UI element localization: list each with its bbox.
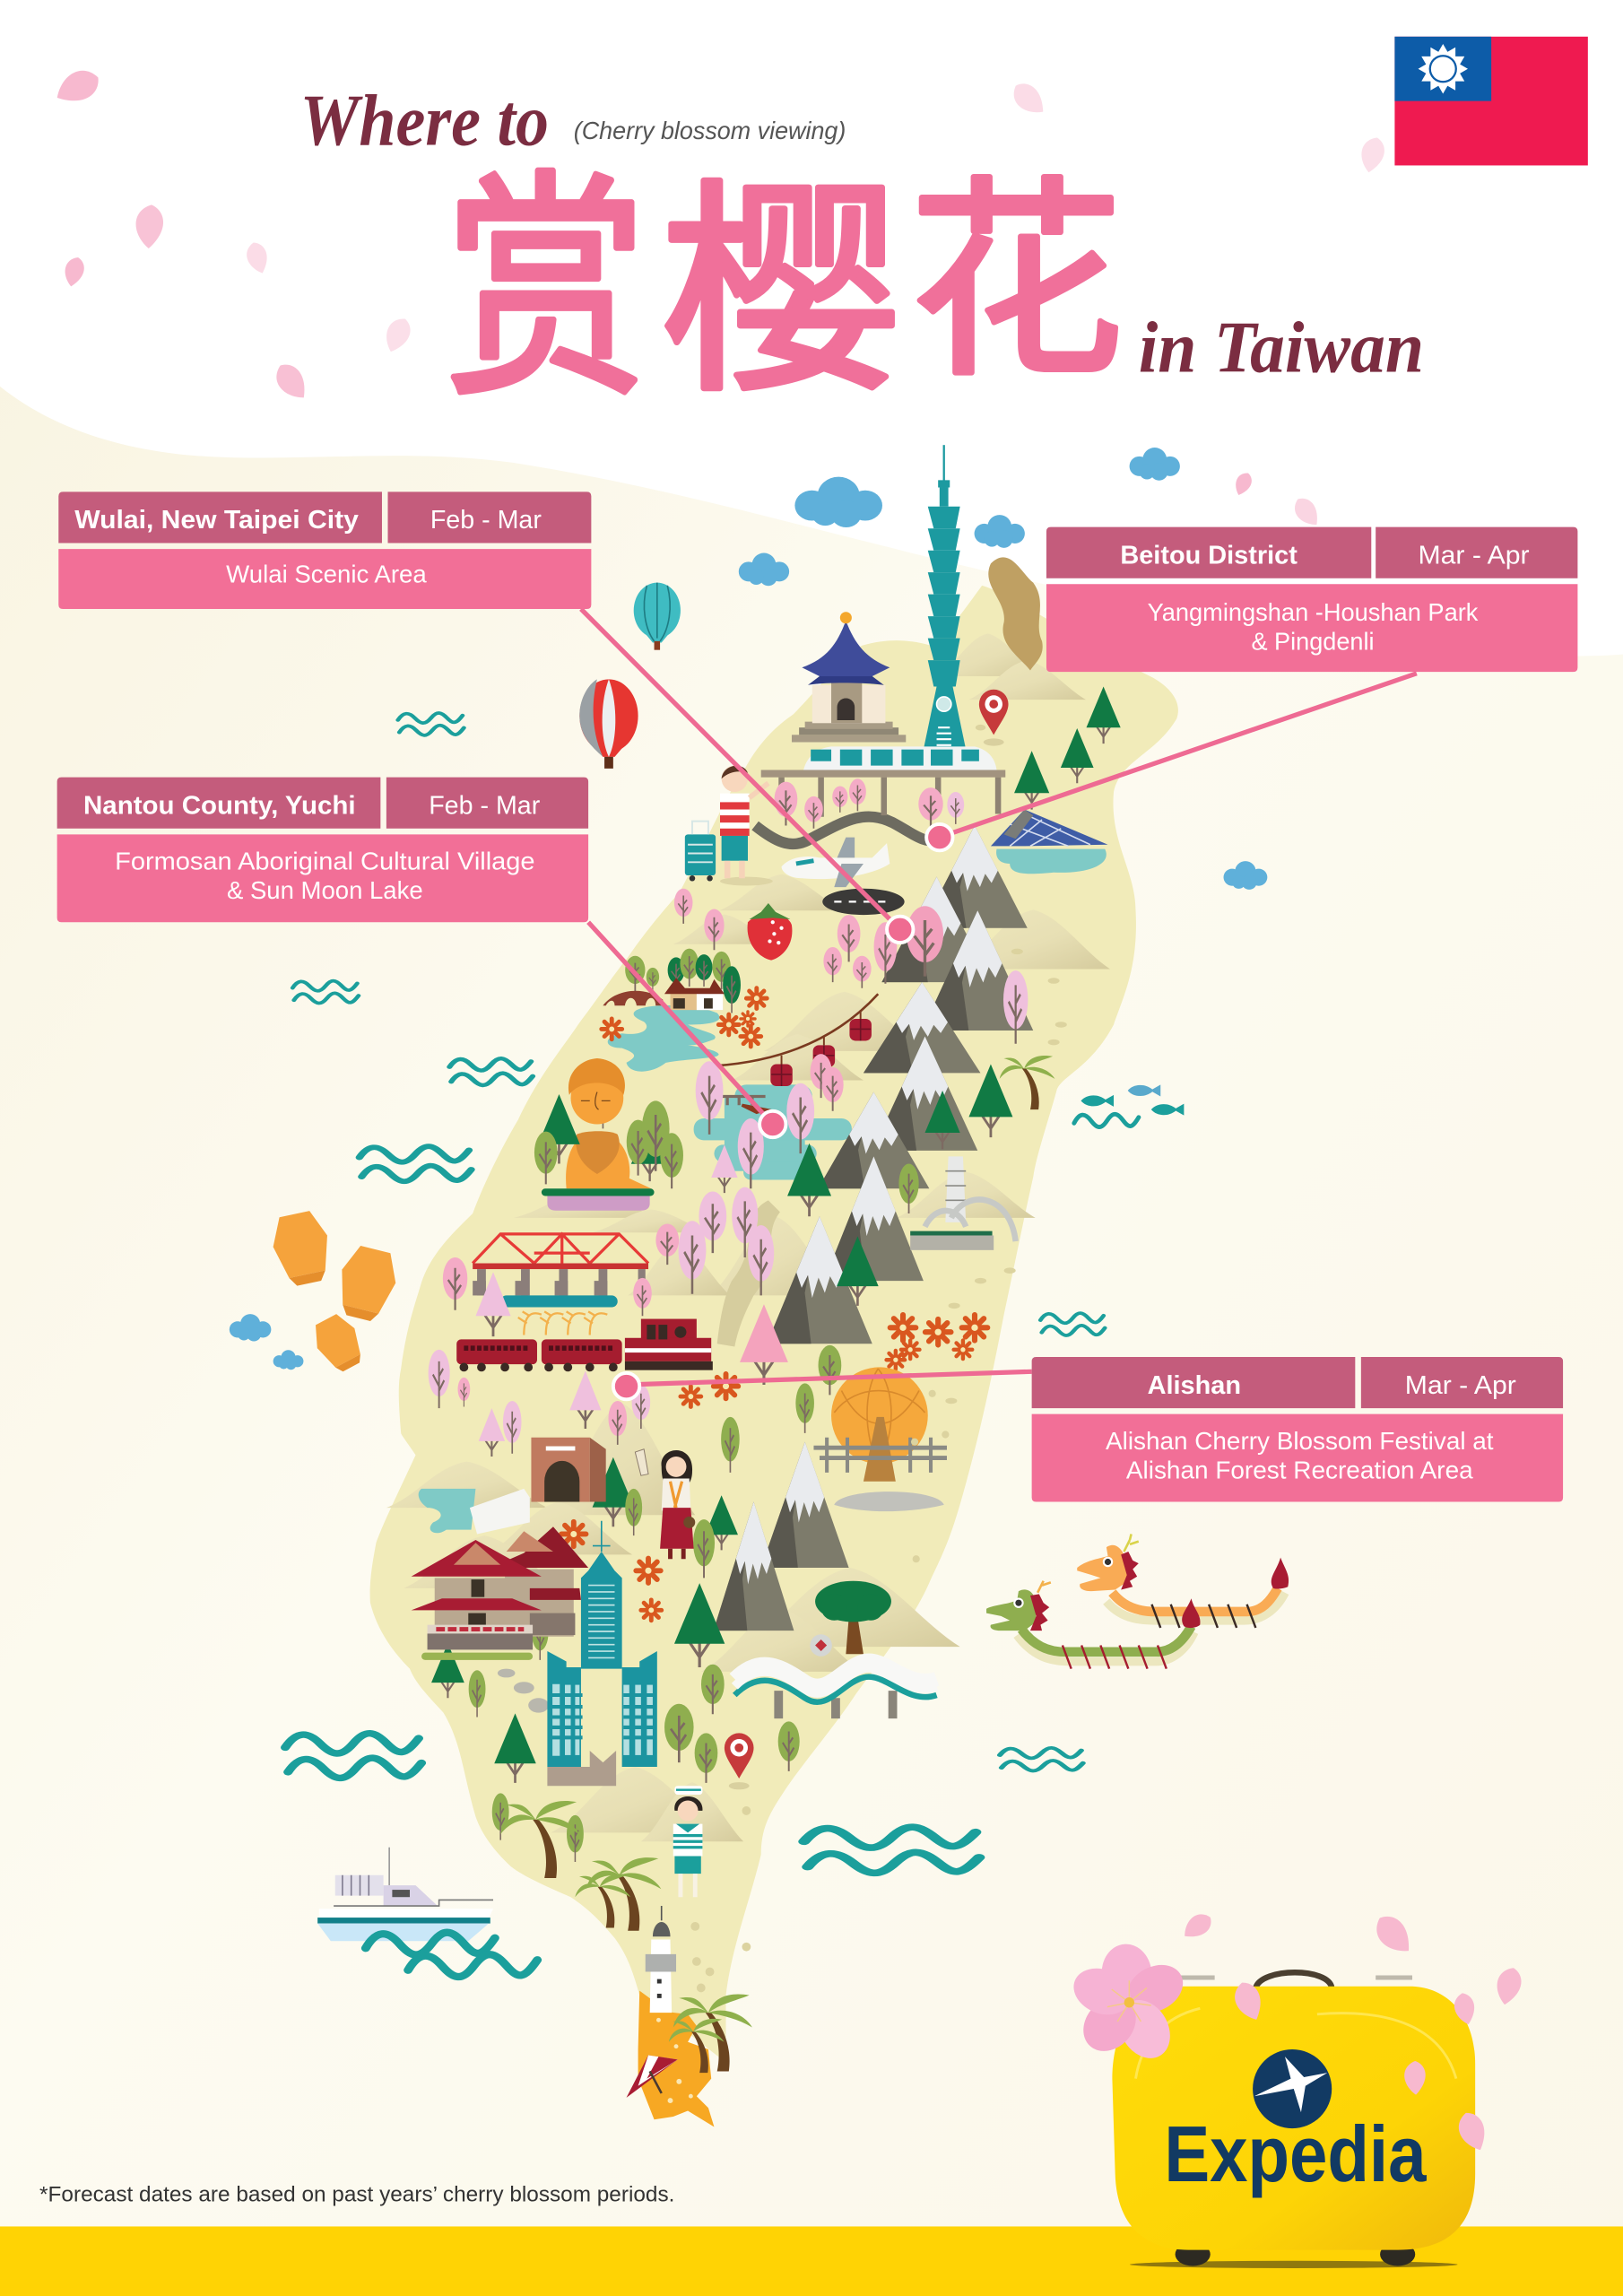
fish xyxy=(1081,1084,1184,1116)
sea waves xyxy=(285,713,1139,1873)
map: south orange beach xyxy=(638,1991,714,2126)
ship waves xyxy=(366,1933,537,1977)
landmark: dome pavilion xyxy=(813,1367,947,1511)
beach umbrella xyxy=(627,2055,678,2098)
landmark: Buddha statue xyxy=(542,1058,655,1211)
map: Taiwan island xyxy=(370,586,1178,2063)
subtitle: (Cherry blossom viewing) xyxy=(574,117,846,144)
map pin south xyxy=(725,1733,754,1789)
panel: Alishan xyxy=(1032,1357,1563,1502)
panel: Wulai xyxy=(58,491,591,609)
trees: pink blossoms xyxy=(429,778,1028,1457)
lower petals xyxy=(1178,1909,1525,2154)
panel: Alishan: Alishan Forest Recreation Area xyxy=(1126,1456,1473,1483)
wheat xyxy=(518,1311,607,1335)
panel: Beitou: Mar - Apr xyxy=(1419,541,1530,570)
title: Chinese characters: 赏 xyxy=(445,97,647,443)
dragon boat: green xyxy=(986,1581,1201,1669)
landmark: Taipei 101 xyxy=(924,445,966,750)
trees: green ovals xyxy=(469,1100,919,1862)
orange flowers xyxy=(561,988,987,1621)
cherry blossom flower xyxy=(1067,1942,1191,2067)
panel: Nantou: Formosan Aboriginal Cultural Village xyxy=(115,847,535,874)
lakes xyxy=(419,849,1107,1533)
strawberry xyxy=(748,903,792,961)
panel: Beitou: Yangmingshan -Houshan Park xyxy=(1148,598,1479,626)
panel: Nantou: Nantou County, Yuchi xyxy=(83,791,356,820)
runway xyxy=(822,889,905,915)
village: trees, bridge and house xyxy=(603,949,741,1013)
ship xyxy=(317,1848,493,1941)
white top wave xyxy=(0,0,1623,656)
solar panels xyxy=(991,810,1108,846)
connector lines xyxy=(581,609,1417,1385)
cable car xyxy=(717,994,878,1112)
train xyxy=(456,1319,713,1371)
panel: Wulai: Feb - Mar xyxy=(430,506,542,535)
suitcase with Expedia logo xyxy=(1112,1972,1475,2268)
hills xyxy=(386,633,1110,1841)
big tree and teapot xyxy=(810,1581,891,1657)
panel: Nantou xyxy=(57,778,588,922)
icon: waterfront building xyxy=(470,1489,530,1534)
panel: Alishan: Mar - Apr xyxy=(1405,1371,1516,1400)
panel: Beitou xyxy=(1046,527,1577,672)
palms south xyxy=(500,1801,752,2073)
panel: Wulai: Wulai Scenic Area xyxy=(226,561,427,588)
mountains xyxy=(714,826,1033,1631)
panel: Beitou: & Pingdenli xyxy=(1251,628,1375,656)
title: Chinese characters: 樱 xyxy=(662,109,901,436)
panel: Wulai: Wulai, New Taipei City xyxy=(74,506,359,535)
suitcase with Expedia logo: Expedia xyxy=(1164,2109,1427,2198)
icon: Yehliu rock xyxy=(988,557,1043,671)
road xyxy=(755,817,940,844)
dragon boat: orange xyxy=(1077,1534,1289,1628)
title: Chinese characters: 花 xyxy=(909,109,1124,417)
icon: map pin north xyxy=(979,690,1009,746)
icon: Taiwan flag xyxy=(1394,37,1588,165)
landmark: monorail xyxy=(761,746,1005,817)
landmark: east coast arches xyxy=(910,1156,1016,1250)
plane xyxy=(782,838,890,887)
panel: Nantou: & Sun Moon Lake xyxy=(227,876,423,904)
title: in Taiwan: in Taiwan xyxy=(1139,307,1424,388)
balloon: red xyxy=(579,679,638,769)
clouds xyxy=(230,448,1267,1370)
title: Where to: Where to xyxy=(300,80,549,161)
map markers xyxy=(613,824,952,1399)
landmark: Taichung temple xyxy=(412,1526,588,1713)
falling petals xyxy=(51,65,1389,531)
panel: Alishan: Alishan xyxy=(1148,1371,1241,1400)
landmark: tunnel xyxy=(531,1438,606,1502)
trees: green pines xyxy=(431,686,1121,1783)
girl with bubble tea xyxy=(635,1449,695,1559)
panel: Nantou: Feb - Mar xyxy=(429,791,541,820)
tourist with suitcase xyxy=(685,766,773,885)
panel: Beitou: Beitou District xyxy=(1120,541,1298,570)
dots on map xyxy=(690,725,1067,1992)
footnote: *Forecast dates are based on past years’ cherry blossom periods. xyxy=(39,2184,674,2207)
logo globe xyxy=(1253,2049,1332,2128)
sailor boy xyxy=(673,1786,702,1897)
palm east xyxy=(1000,1056,1055,1109)
white scenic bridge xyxy=(734,1661,937,1718)
lighthouse xyxy=(646,1906,676,2013)
yellow footer band xyxy=(0,2226,1623,2296)
landmark: red railway bridge xyxy=(473,1234,648,1307)
landmark: Chiang Kai-shek Memorial xyxy=(792,612,906,743)
sky lanterns xyxy=(267,1208,403,1377)
beach dots xyxy=(656,2018,693,2103)
landmark: 85 Sky Tower xyxy=(547,1521,657,1786)
title: Chinese characters xyxy=(445,97,1124,443)
panel: Alishan: Alishan Cherry Blossom Festival at xyxy=(1106,1427,1494,1455)
balloon: teal xyxy=(634,583,681,650)
